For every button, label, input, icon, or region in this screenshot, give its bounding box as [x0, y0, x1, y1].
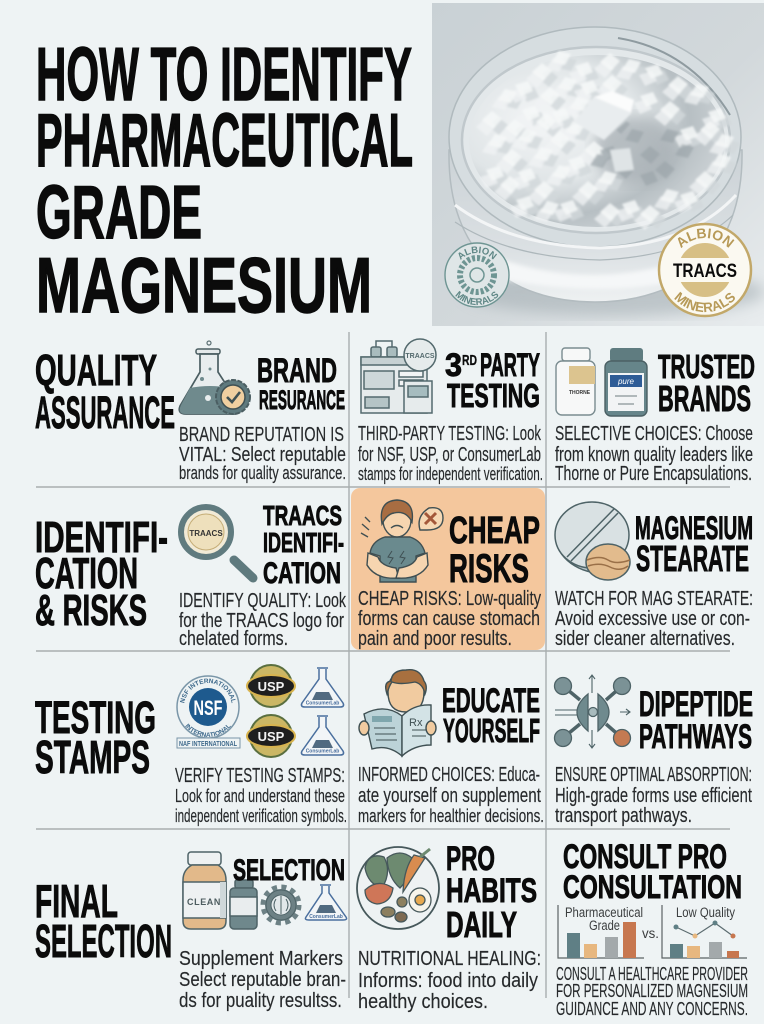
title: GRADE: [36, 170, 202, 254]
body text: for the TRAACS logo for: [179, 610, 344, 632]
body text: [179, 424, 346, 483]
text: ASSURANCE: [35, 387, 175, 438]
icon: flask with check badge: [179, 341, 250, 414]
cell: consult pro consultation: [556, 838, 748, 1019]
body text: [358, 588, 541, 650]
body text: [179, 590, 347, 650]
photo: jar of magnesium crystals: [432, 3, 764, 326]
body text: [555, 423, 753, 485]
icon: supplement bottles: THORNE: [569, 390, 591, 396]
powder at bottom of jar: [478, 250, 712, 289]
body text: [179, 948, 346, 1012]
label: vs.: vs.: [642, 926, 659, 941]
body text: [555, 588, 753, 650]
seal: Albion TRAACS gold: MINERALS: [674, 292, 735, 312]
grid lines: [36, 332, 730, 998]
jar body: [449, 150, 742, 302]
seal: Albion TRAACS gold: [658, 222, 752, 318]
icon: clean bottle, small bottle, gear, flask: ConsumerLab: [309, 914, 343, 920]
heading: YOURSELF: [443, 712, 540, 749]
icon: USP stamps: USP: [258, 729, 285, 744]
heading: [446, 840, 537, 945]
icon: USP stamps: [247, 665, 295, 757]
cell: trusted brands: [555, 348, 755, 485]
seal: Albion Minerals teal: MINERALS: [455, 291, 498, 306]
heading: RD: [462, 352, 477, 369]
section heading: final selection: SELECTION: [35, 915, 172, 967]
icon: ConsumerLab flasks: [301, 668, 344, 755]
icon: clean bottle, small bottle, gear, flask: [183, 852, 347, 929]
body text: Look for and understand these: [175, 785, 345, 806]
cell: brand resurance: [179, 341, 346, 483]
title: PHARMACEUTICAL: [36, 98, 413, 182]
section heading: final selection: FINAL: [35, 875, 118, 927]
heading: BRAND: [257, 352, 337, 390]
heading: [263, 500, 344, 590]
icon: person reading book: Rx: [409, 717, 423, 729]
heading: [635, 510, 753, 579]
cell: TRAACS identification: [179, 500, 347, 650]
heading: [639, 685, 753, 756]
heading: [449, 510, 540, 591]
icon: lab machine and stamp: TRAACS: [405, 353, 435, 360]
section heading: testing stamps: STAMPS: [35, 731, 150, 783]
heading: HABITS: [446, 872, 537, 910]
title: HOW TO IDENTIFY: [36, 32, 412, 116]
icon: magnifying glass: TRAACS: [189, 529, 223, 538]
icon: person reading book: [359, 670, 436, 756]
heading: DAILY: [446, 904, 517, 945]
cell: cheap risks: [358, 500, 541, 650]
cell: dipeptide pathways: [554, 675, 753, 827]
heading: [445, 347, 540, 414]
icon: person with stomach pain: [361, 500, 443, 582]
heading: IDENTIFI-: [263, 527, 344, 558]
heading: RESURANCE: [259, 385, 345, 415]
body text: Select reputable bran-: [179, 969, 346, 991]
body text: brands for quality assurance.: [179, 462, 346, 483]
body text: VERIFY TESTING STAMPS:: [175, 765, 345, 787]
body text: [358, 948, 541, 1013]
icon: supplement bottles: [556, 348, 647, 416]
section heading: identification and risks: CATION: [35, 549, 138, 598]
icon: USP stamps: USP: [258, 679, 285, 694]
heading: [442, 682, 540, 749]
body text: ds for puality resultss.: [179, 990, 342, 1012]
cell: pro habits daily: [357, 840, 541, 1013]
icon: NSF stamp: NSF: [194, 697, 223, 720]
body text: NUTRITIONAL HEALING:: [358, 948, 541, 970]
body text: ate yourself on supplement: [358, 785, 541, 807]
body text: BRAND REPUTATION IS: [179, 424, 344, 446]
title: MAGNESIUM: [36, 241, 372, 329]
body text: stamps for independent verification.: [358, 463, 543, 484]
body text: [358, 423, 543, 484]
icon: NSF stamp: NSF INTERNATIONAL: [180, 678, 236, 704]
body text: VITAL: Select reputable: [179, 444, 346, 466]
icon: tablet and capsule: [555, 502, 630, 580]
section heading: testing stamps: [35, 692, 156, 783]
cell: educate yourself: [358, 670, 544, 826]
heading: [658, 348, 755, 419]
highlight panel: cheap risks: [351, 488, 545, 650]
crystals: [469, 55, 725, 227]
heading: PARTY: [480, 347, 540, 383]
icon: ConsumerLab flasks: ConsumerLab: [306, 748, 339, 754]
heading: EDUCATE: [442, 682, 540, 720]
cell: selection: [179, 852, 347, 1012]
heading: RISKS: [449, 547, 529, 591]
heading: TESTING: [447, 377, 540, 414]
icon: lab machine and stamp: [361, 339, 436, 413]
body text: healthy choices.: [358, 991, 488, 1013]
icon: NSF stamp: INTERNATIONAL: [185, 724, 231, 737]
icon: clean bottle, small bottle, gear, flask: CLEAN: [187, 897, 221, 907]
icon: molecular transport: [554, 675, 630, 748]
seal: Albion TRAACS gold: TRAACS: [673, 261, 737, 282]
heading: TRAACS: [263, 500, 342, 531]
body text: pain and poor results.: [358, 628, 512, 650]
chart: low quality: [662, 905, 747, 958]
icon: magnifying glass: [181, 507, 253, 578]
heading: [257, 352, 345, 415]
body text: [358, 764, 544, 826]
heading: [563, 838, 742, 905]
body text: IDENTIFY QUALITY: Look: [179, 590, 347, 612]
rim: [449, 27, 741, 247]
body text: transport pathways.: [555, 805, 692, 827]
icon: ConsumerLab flasks: ConsumerLab: [306, 700, 339, 706]
bar chart: pharmaceutical grade: [558, 905, 644, 958]
body text: [175, 765, 347, 826]
heading: 3: [445, 347, 462, 383]
heading: SELECTION: [233, 854, 345, 887]
section heading: testing stamps: TESTING: [35, 692, 156, 743]
cell: magnesium stearate: [555, 502, 753, 650]
body text: Supplement Markers: [179, 948, 343, 970]
heading: CHEAP: [449, 510, 540, 552]
body text: THIRD-PARTY TESTING: Look: [358, 423, 542, 445]
section heading: quality assurance: [35, 346, 175, 438]
chart: low quality: Low Quality: [676, 905, 735, 920]
icon: supplement bottles: pure: [617, 377, 635, 386]
section heading: identification and risks: IDENTIFI-: [35, 513, 168, 562]
body text: [555, 764, 752, 827]
icon: NSF stamp: NAF INTERNATIONAL: [179, 741, 238, 748]
body text: for NSF, USP, or ConsumerLab: [358, 444, 541, 466]
heading: CATION: [263, 557, 341, 590]
body text: markers for healthier decisions.: [358, 805, 544, 826]
seal: Albion Minerals teal: ALBION: [458, 246, 497, 260]
body text: independent verification symbols.: [175, 805, 347, 826]
body text: Informs: food into daily: [358, 970, 538, 992]
section heading: identification and risks: & RISKS: [35, 586, 147, 635]
body text: CHEAP RISKS: Low-quality: [358, 588, 541, 610]
icon: NSF stamp: [176, 675, 240, 748]
seal: Albion TRAACS gold: ALBION: [678, 228, 734, 248]
cell: 3rd party testing: [358, 339, 543, 484]
icon: plate of healthy food: [357, 847, 439, 929]
body text: [556, 963, 748, 1019]
body text: INFORMED CHOICES: Educa-: [358, 764, 540, 786]
bar chart: pharmaceutical grade: Pharmaceutical: [565, 905, 643, 920]
section heading: identification and risks: [35, 513, 168, 635]
body text: chelated forms.: [179, 628, 288, 650]
body text: forms can cause stomach: [358, 608, 540, 630]
cell: verification stamps: [175, 664, 347, 826]
seal: Albion Minerals teal: [444, 242, 510, 308]
bar chart: pharmaceutical grade: Grade: [589, 918, 620, 933]
title: [36, 32, 413, 329]
section heading: quality assurance: QUALITY: [35, 346, 157, 395]
heading: PRO: [446, 840, 495, 878]
section heading: final selection: [35, 875, 172, 967]
